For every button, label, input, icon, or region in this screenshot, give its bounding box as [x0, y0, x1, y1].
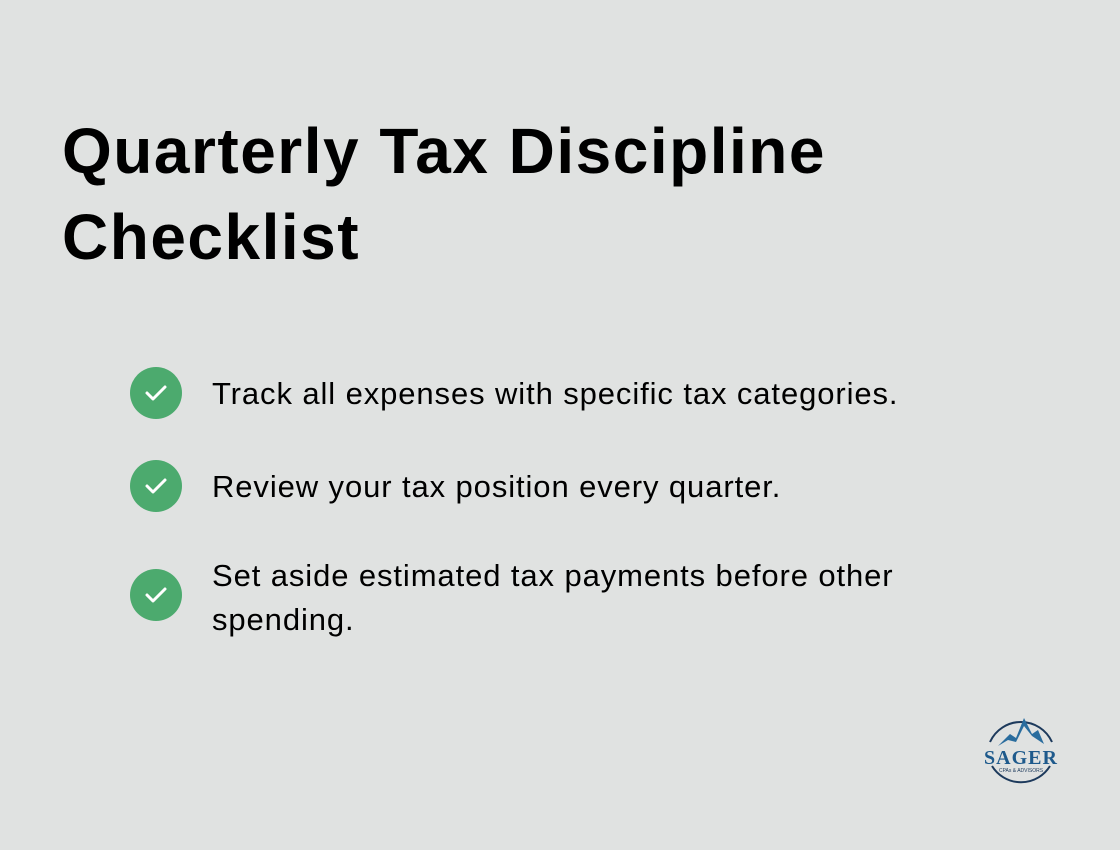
logo: Sager: CPAs & ADVISORS	[999, 768, 1044, 774]
text: spending.	[212, 602, 355, 637]
logo: Sager	[984, 718, 1058, 784]
icon: check	[130, 460, 182, 512]
text: Set aside estimated tax payments before other	[212, 558, 894, 593]
title	[62, 115, 826, 273]
title: Quarterly Tax Discipline	[62, 115, 826, 187]
title: Checklist	[62, 201, 360, 273]
icon: check	[130, 367, 182, 419]
text	[212, 558, 894, 637]
text: Track all expenses with specific tax categories.	[212, 376, 898, 411]
text: Review your tax position every quarter.	[212, 469, 781, 504]
checklist item 2	[130, 460, 781, 512]
checklist item 1	[130, 367, 898, 419]
icon: check	[130, 569, 182, 621]
logo: Sager: SAGER	[984, 747, 1058, 769]
checklist item 3	[130, 558, 894, 637]
